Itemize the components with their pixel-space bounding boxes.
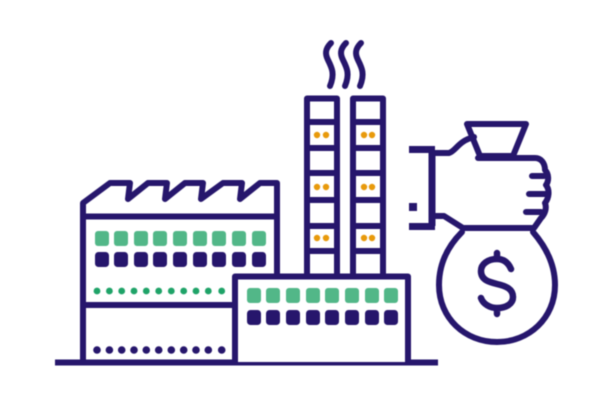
shirt cuff: [409, 150, 435, 226]
fist outline: [435, 137, 549, 228]
navy window row, front building: [247, 310, 398, 325]
chimneys: [307, 98, 383, 275]
green window row, front building: [247, 288, 398, 303]
factory saw-tooth roof and walls: [83, 183, 277, 362]
icon: hand holding money bag: [409, 124, 555, 342]
bag neck: [467, 124, 526, 156]
finger lines: [526, 176, 546, 212]
money bag body: [439, 232, 555, 342]
cuff button: [409, 203, 417, 211]
left chimney: [307, 98, 337, 275]
navy window row, main building: [95, 252, 266, 267]
lower floor divider: [83, 302, 235, 308]
smoke: [326, 43, 363, 86]
right chimney: [353, 98, 383, 275]
ground line: [55, 360, 438, 366]
green dotted row: [94, 288, 225, 294]
chimney orange lights: [314, 132, 375, 241]
navy dotted row: [93, 346, 226, 354]
upper floor divider: [83, 214, 277, 220]
main factory building: [83, 183, 277, 362]
dollar sign icon: [481, 253, 513, 314]
front building: [235, 276, 408, 362]
green window row, main building: [95, 231, 266, 246]
